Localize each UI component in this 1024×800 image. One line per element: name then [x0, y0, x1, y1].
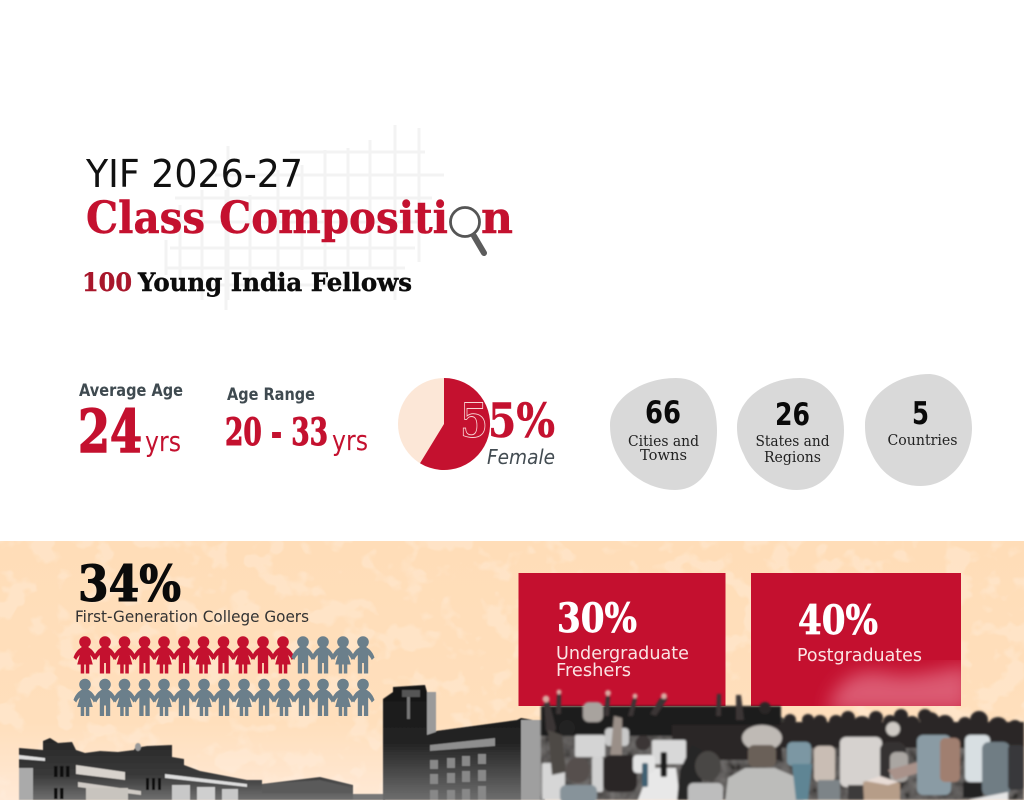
blob: cities and towns: [610, 378, 717, 490]
heads along the top of the crowd: [759, 702, 1023, 737]
stat: age range: [225, 385, 368, 457]
stat: average age: Average Age: [79, 381, 183, 401]
callout: undergraduate freshers: Undergraduate: [556, 643, 689, 664]
stat: average age: 24: [78, 397, 142, 466]
callout: postgraduates: Postgraduates: [797, 645, 922, 666]
title line: YIF 2026-27: YIF 2026-27: [85, 152, 303, 196]
peach background band: [0, 541, 1024, 800]
subtitle: 100 Young India Fellows: 100: [82, 268, 132, 297]
photo: crowd of fellows: [541, 690, 1024, 800]
callout: postgraduates: 40%: [798, 597, 878, 644]
blob: cities and towns: Cities and: [628, 432, 699, 450]
callout: undergraduate freshers: 30%: [557, 595, 637, 642]
pie label: 55%: 5%: [488, 394, 555, 449]
stat: first-generation college goers: First-Generation College Goers: [75, 607, 309, 626]
blob: states and regions: Regions: [764, 448, 821, 466]
stat: average age: [78, 381, 183, 466]
cardboard box: [863, 776, 900, 800]
title block: [82, 152, 513, 297]
stat: average age: yrs: [145, 425, 181, 458]
blob: cities and towns: Towns: [640, 446, 687, 464]
heading: Class Composition: Class Compositi: [86, 193, 448, 244]
raised-arm attendees and rows: [542, 702, 723, 800]
heading: Class Composition: n: [481, 193, 513, 244]
blob: countries: Countries: [888, 431, 958, 449]
pictogram: people row two: [74, 679, 374, 716]
pie label: 55%: 5: [460, 394, 488, 449]
pictogram: people row one: [74, 636, 374, 674]
stat: age range: 20 - 33: [225, 410, 328, 454]
blob: states and regions: 26: [775, 397, 810, 433]
blob: states and regions: States and: [756, 432, 830, 450]
blob: states and regions: [737, 378, 844, 490]
stat: first-generation college goers: 34%: [78, 554, 181, 613]
grid texture behind title: [165, 125, 444, 310]
subtitle: 100 Young India Fellows: Young India Fellows: [137, 268, 412, 297]
pie label: 55%: [460, 394, 555, 449]
blob: cities and towns: 66: [645, 395, 681, 431]
callout: undergraduate freshers: [518, 573, 726, 706]
blob: countries: 5: [912, 396, 929, 432]
man in cap foreground: [725, 725, 804, 800]
pie chart: 55% female: [398, 378, 555, 470]
blob: countries: [865, 374, 972, 486]
stat: age range: yrs: [332, 424, 368, 457]
callout: undergraduate freshers: Freshers: [556, 660, 631, 681]
icon: magnifying glass: [450, 208, 484, 253]
stat: age range: Age Range: [227, 385, 315, 405]
photo: right campus tower: [383, 685, 545, 800]
raised hands: [544, 694, 744, 740]
callout: postgraduates: [751, 573, 970, 712]
photo: left campus building: [19, 738, 385, 800]
pie label: Female: Female: [487, 445, 555, 469]
stat: first-generation college goers: [75, 554, 309, 626]
standing people: [787, 722, 1024, 800]
crowd base: [541, 706, 1024, 800]
